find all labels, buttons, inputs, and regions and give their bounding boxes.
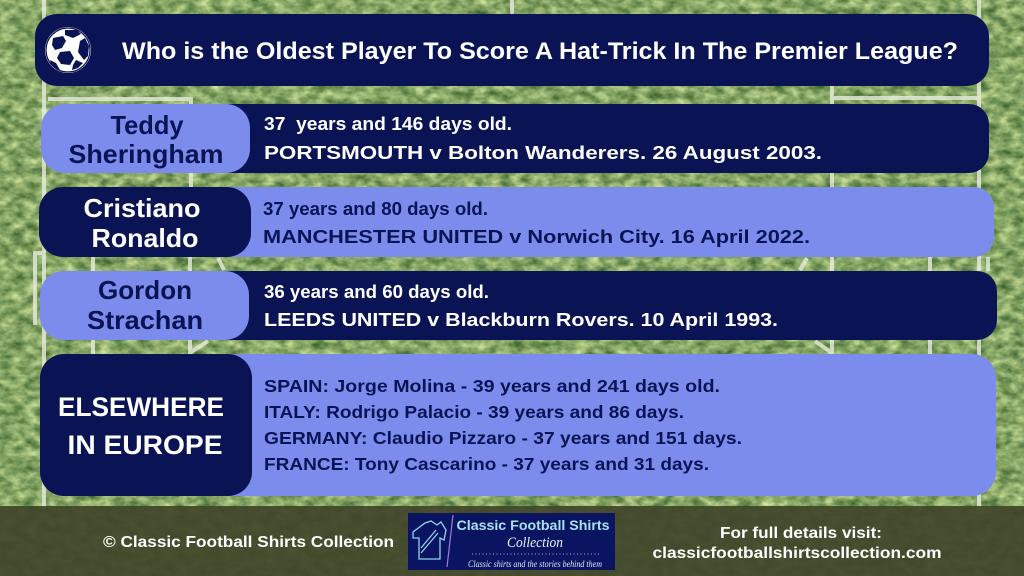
detail panel: 37 years and 80 days old. [263,198,488,219]
detail panel [190,354,996,496]
detail panel: GERMANY: Claudio Pizzaro - 37 years and 151 days. [264,428,742,448]
detail panel: MANCHESTER UNITED v Norwich City. 16 April 2022. [263,226,810,247]
logo: Classic shirts and the stories behind them [468,559,602,569]
footer call to action: For full details visit: [720,525,882,542]
footer call to action: classicfootballshirtscollection.com [652,545,942,562]
name panel: IN EUROPE [68,430,222,460]
detail panel: ITALY: Rodrigo Palacio - 39 years and 86 days. [264,402,684,422]
detail panel: SPAIN: Jorge Molina - 39 years and 241 days old. [264,376,720,396]
title banner [35,14,989,86]
icon: shirt [413,521,446,559]
name panel [40,354,252,496]
name panel: Gordon [98,275,192,305]
name panel: Teddy [110,110,184,140]
panel: elsewhere in Europe [40,354,996,496]
logo [408,513,615,570]
detail panel: PORTSMOUTH v Bolton Wanderers. 26 August 2003. [264,142,822,163]
name panel: ELSEWHERE [58,392,224,422]
detail panel: 37 years and 146 days old. [264,113,512,134]
icon: football [45,27,91,73]
logo: Collection [507,535,563,551]
row: Gordon Strachan [40,271,997,340]
footer copyright: © Classic Football Shirts Collection [103,534,394,551]
detail panel [190,187,994,257]
name panel: Cristiano [84,193,200,223]
name panel [39,187,251,257]
title text: Who is the Oldest Player To Score A Hat-Trick In The Premier League? [122,38,958,65]
logo: Classic Football Shirts [456,517,610,533]
name panel: Ronaldo [92,223,198,253]
detail panel [190,104,989,173]
row: Cristiano Ronaldo [39,187,994,257]
name panel: Sheringham [68,139,224,169]
name panel [40,271,249,340]
detail panel: LEEDS UNITED v Blackburn Rovers. 10 April 1993. [264,309,778,330]
detail panel: 36 years and 60 days old. [264,281,489,302]
row: Teddy Sheringham [41,104,989,173]
name panel: Strachan [87,305,203,335]
detail panel [190,271,997,340]
detail panel: FRANCE: Tony Cascarino - 37 years and 31 days. [264,454,709,474]
footer band [0,506,1024,576]
name panel [41,104,250,173]
footer call to action [652,525,942,562]
